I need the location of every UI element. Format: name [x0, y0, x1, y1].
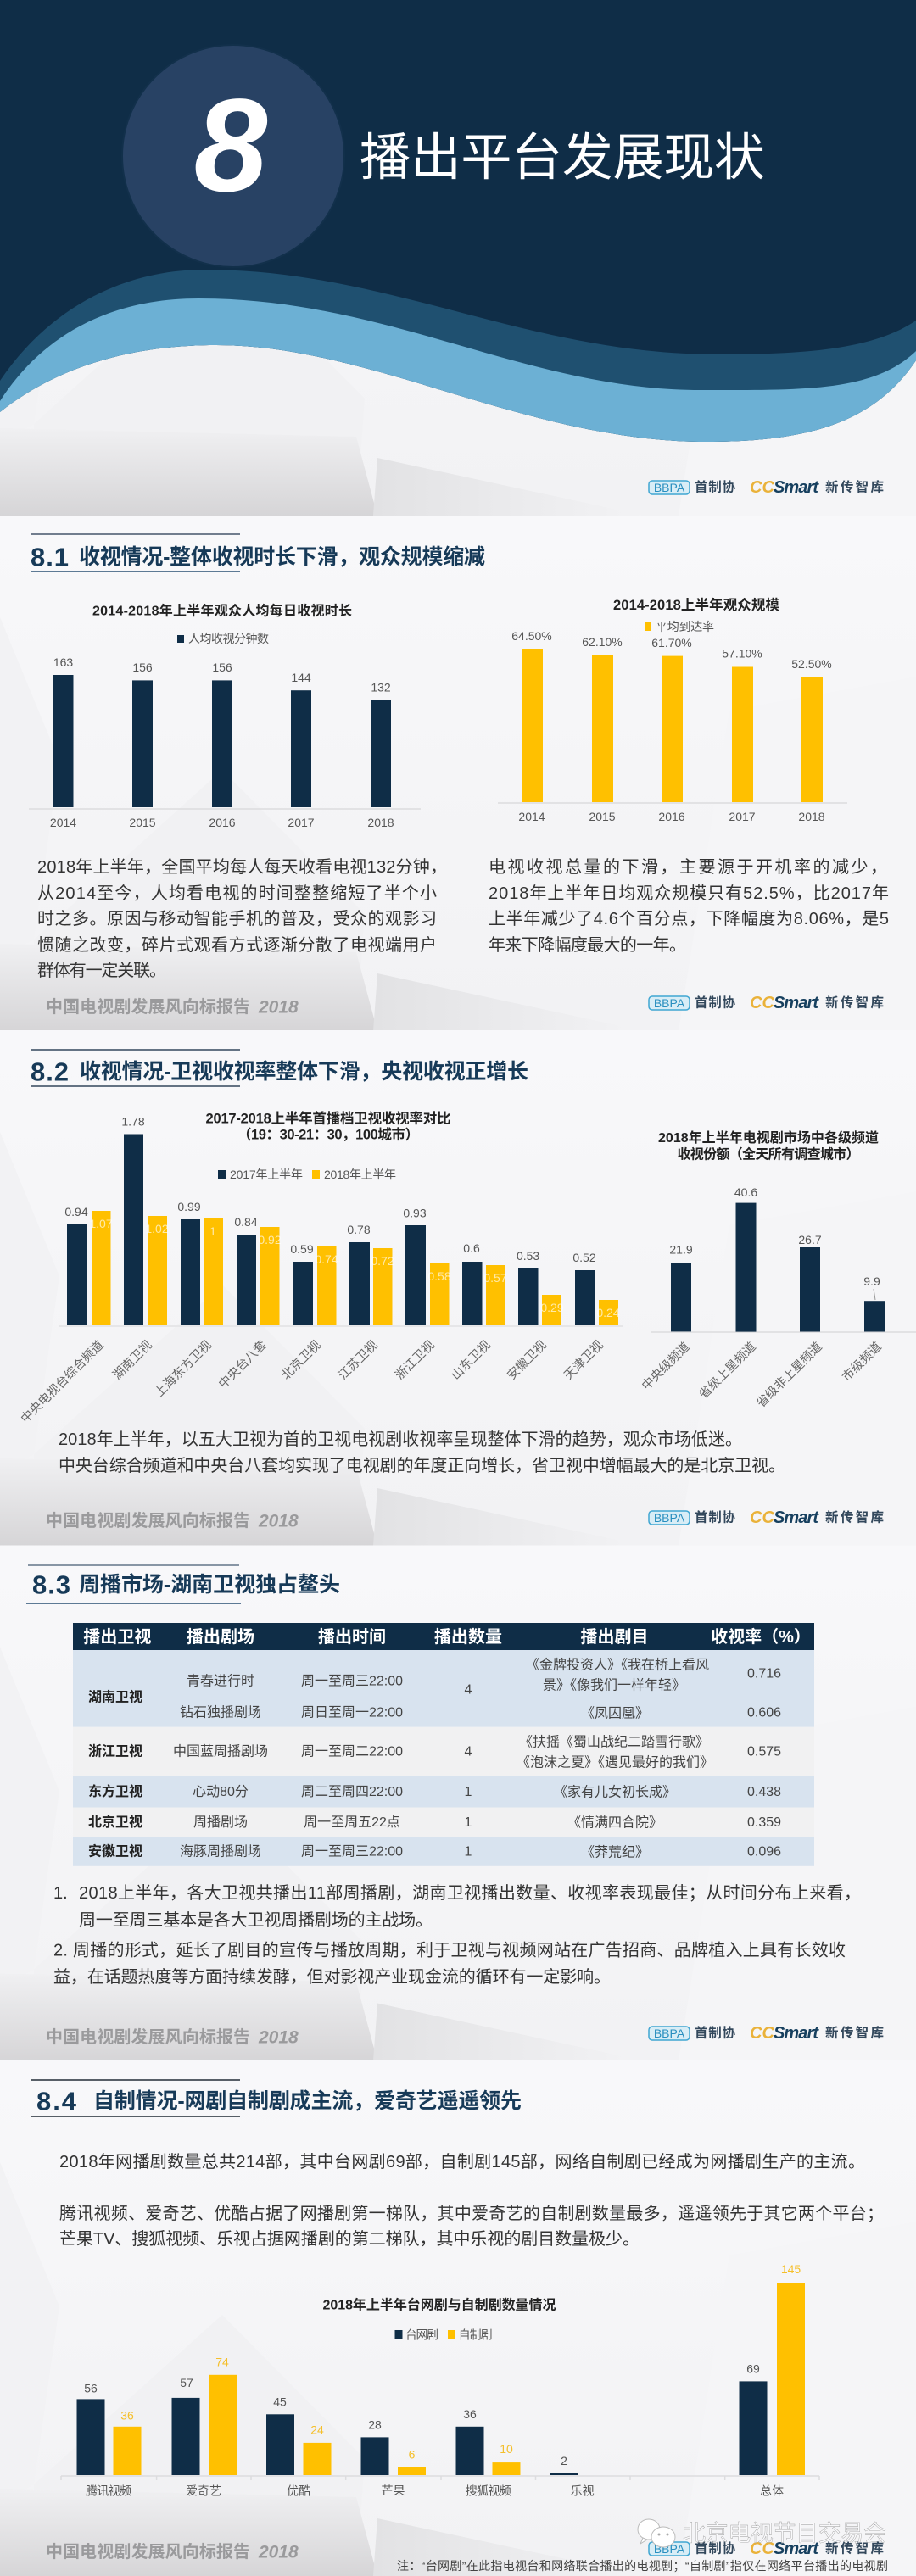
- footer 8.4: 新传智库: [825, 2540, 884, 2556]
- bar chart: satellite channel ratings: 浙江卫视: [393, 1338, 438, 1383]
- footer 8.2: CC: [750, 1508, 774, 1527]
- row: Dongfang: [73, 1776, 814, 1808]
- bar chart: daily viewing minutes: 144: [291, 671, 311, 684]
- wave: dark blue band: [0, 270, 916, 442]
- row: Anhui: 0.096: [747, 1845, 781, 1859]
- row: Zhejiang: 浙江卫视: [88, 1743, 142, 1759]
- bar chart: web drama counts: 爱奇艺: [186, 2484, 221, 2498]
- text block: right analysis: 上半年减少了4.6个百分点，下降幅度为8.06%，是5: [489, 909, 889, 928]
- bar chart: web drama counts: 10: [500, 2442, 513, 2456]
- bar chart: audience reach: 64.50%: [511, 629, 552, 643]
- text block: left analysis: 从2014至今，人均看电视的时间整整缩短了半个小: [37, 884, 437, 903]
- bar chart: web drama counts: 腾讯视频: [86, 2484, 131, 2498]
- row: Beijing: 0.359: [747, 1815, 781, 1830]
- bar chart: satellite channel ratings: 0.24: [596, 1306, 620, 1319]
- heading 8.2: [31, 1050, 528, 1087]
- heading 8.1: 8.1: [31, 543, 69, 572]
- bar chart: web drama counts: 74: [215, 2356, 229, 2369]
- footer 8.2: 首制协: [695, 1509, 735, 1525]
- bar chart: audience reach: [498, 596, 847, 823]
- bar chart: daily viewing minutes: 2017: [288, 816, 315, 829]
- logos: 首制协: [695, 478, 735, 495]
- bar chart: channel market share: 9.9: [863, 1274, 880, 1288]
- heading 8.2: 收视情况-卫视收视率整体下滑，央视收视正增长: [80, 1060, 528, 1084]
- bar chart: web drama counts: 搜狐视频: [466, 2484, 511, 2498]
- table header: 播出剧场: [187, 1627, 254, 1647]
- row: Dongfang: 《家有儿女初长成》: [554, 1784, 676, 1799]
- bar chart: channel market share: [639, 1129, 916, 1410]
- footnote: 注：“台网剧”在此指电视台和网络联合播出的电视剧；“自制剧”指仅在网络平台播出的电视剧: [397, 2559, 888, 2573]
- bar chart: satellite channel ratings: 中央电视台综合频道: [18, 1338, 107, 1426]
- footer 8.2: 新传智库: [825, 1509, 884, 1525]
- bar chart: satellite channel ratings: 0.92: [258, 1233, 282, 1246]
- bar chart: audience reach: 2015: [589, 810, 616, 823]
- row: Beijing: 周播剧场: [193, 1815, 248, 1830]
- bar chart: audience reach: 2016: [658, 810, 685, 823]
- panel: 8.4: [0, 2060, 916, 2576]
- bar chart: satellite channel ratings: 0.72: [371, 1254, 394, 1268]
- watermark text: 北京电视节目交易会: [683, 2521, 886, 2546]
- bar chart: web drama counts: 芒果: [382, 2484, 405, 2498]
- icon: wechat watermark: [638, 2519, 675, 2547]
- row: Dongfang: 1: [465, 1785, 472, 1799]
- bar chart: satellite channel ratings: 上海东方卫视: [152, 1338, 215, 1400]
- row: Anhui: 《莽荒纪》: [581, 1845, 649, 1860]
- bar chart: satellite channel ratings: 1: [209, 1224, 216, 1238]
- row: Hunan: 钻石独播剧场: [180, 1704, 261, 1720]
- footer 8.3: 首制协: [695, 2025, 735, 2040]
- bar chart: satellite channel ratings: 安徽卫视: [505, 1338, 550, 1383]
- text block: right analysis: [489, 857, 889, 955]
- footer 8.1: 新传智库: [825, 994, 884, 1011]
- footer 8.1: [46, 994, 884, 1018]
- bar chart: web drama counts: [61, 2262, 819, 2498]
- row: Hunan: 周日至周一22:00: [301, 1706, 403, 1720]
- bar chart: satellite channel ratings: 0.58: [427, 1269, 451, 1283]
- wave: light blue band: [0, 298, 916, 442]
- logos: CC: [750, 478, 774, 497]
- text block: left analysis: 时之多。原因与移动智能手机的普及，受众的观影习: [37, 909, 437, 928]
- text block: left analysis: [37, 857, 447, 980]
- bar chart: web drama counts: 36: [463, 2407, 477, 2421]
- bar chart: web drama counts: 6: [409, 2448, 416, 2462]
- bar chart: daily viewing minutes: 2014-2018年上半年观众人均每日收视时长: [92, 602, 352, 619]
- bar chart: channel market share: 40.6: [734, 1185, 757, 1199]
- bar chart: audience reach: 2017: [729, 810, 756, 823]
- footer 8.4: BBPA: [654, 2542, 685, 2556]
- header background navy: [0, 0, 916, 442]
- bar chart: satellite channel ratings: 江苏卫视: [336, 1338, 381, 1383]
- row: Hunan: 4: [465, 1682, 472, 1698]
- bar chart: satellite channel ratings: 湖南卫视: [110, 1338, 155, 1383]
- table header: 播出数量: [434, 1627, 502, 1647]
- row: Zhejiang: 周一至周二22:00: [301, 1745, 403, 1759]
- row: Hunan: 0.606: [747, 1706, 781, 1720]
- row: Beijing: 1: [465, 1815, 472, 1830]
- text block: left analysis: 惯随之改变，碎片式观看方式逐渐分散了电视端用户: [37, 935, 437, 955]
- bar chart: satellite channel ratings: [18, 1109, 623, 1426]
- logos: BBPA: [654, 481, 685, 494]
- row: Dongfang: 心动80分: [193, 1784, 249, 1799]
- text block: web drama analysis: 腾讯视频、爱奇艺、优酷占据了网播剧第一梯队，其中爱奇艺的自制剧数量最多，遥遥领先于其它两个平台；: [59, 2204, 884, 2223]
- bar chart: web drama counts: 57: [180, 2376, 193, 2389]
- row: Hunan: [73, 1650, 814, 1727]
- footer 8.1: CC: [750, 994, 774, 1012]
- logos: 新传智库: [825, 478, 884, 495]
- text block: satellite analysis: 2018年上半年，以五大卫视为首的卫视电视剧收视率呈现整体下滑的趋势，观众市场低迷。: [59, 1430, 742, 1449]
- bar chart: web drama counts: 69: [746, 2362, 760, 2376]
- bar chart: satellite channel ratings: 0.84: [234, 1215, 258, 1229]
- table header: 播出卫视: [83, 1627, 151, 1647]
- bar chart: daily viewing minutes: 156: [132, 661, 153, 674]
- footer 8.3: CC: [750, 2024, 774, 2043]
- footer 8.3: BBPA: [654, 2027, 685, 2040]
- footer 8.4: 中国电视剧发展风向标报告: [46, 2542, 250, 2562]
- footer 8.3: 中国电视剧发展风向标报告: [46, 2027, 250, 2047]
- bar chart: satellite channel ratings: 1.78: [121, 1115, 145, 1129]
- row: Anhui: 海豚周播剧场: [180, 1843, 261, 1859]
- bar chart: daily viewing minutes: 2018: [367, 816, 394, 829]
- bar chart: satellite channel ratings: 0.94: [64, 1205, 88, 1218]
- bar chart: channel market share: 收视份额（全天所有调查城市）: [677, 1146, 860, 1162]
- bar chart: web drama counts: 145: [781, 2262, 801, 2276]
- bar chart: satellite channel ratings: 0.74: [315, 1252, 338, 1266]
- bar chart: web drama counts: 优酷: [287, 2484, 310, 2498]
- bar chart: audience reach: 52.50%: [791, 657, 832, 671]
- bar chart: audience reach: 62.10%: [582, 635, 623, 649]
- text block: weekly notes: 1.: [53, 1884, 68, 1903]
- row: Dongfang: 0.438: [747, 1785, 781, 1799]
- row: Beijing: 北京卫视: [88, 1814, 142, 1830]
- bar chart: audience reach: 2014: [518, 810, 545, 823]
- footer 8.1: 2018: [258, 997, 299, 1018]
- row: Zhejiang: 《泡沫之夏》《遇见最好的我们》: [517, 1755, 713, 1770]
- text block: web drama analysis: 芒果TV、搜狐视频、乐视占据网播剧的第二梯队，其中乐视的剧目数量极少。: [59, 2229, 640, 2249]
- table header: [73, 1623, 814, 1650]
- heading 8.2: 8.2: [31, 1057, 69, 1087]
- row: Zhejiang: 《扶摇《蜀山战纪二踏雪行歌》: [519, 1735, 709, 1750]
- text block: satellite analysis: 中央台综合频道和中央台八套均实现了电视剧的年度正向增长，省卫视中增幅最大的是北京卫视。: [59, 1456, 785, 1475]
- row: Zhejiang: 4: [465, 1745, 472, 1759]
- bar chart: daily viewing minutes: 156: [212, 661, 232, 674]
- text block: web drama analysis: [59, 2152, 884, 2249]
- bar chart: audience reach: 2018: [798, 810, 825, 823]
- row: Hunan: 《凤囚凰》: [581, 1706, 649, 1721]
- text block: right analysis: 2018年上半年日均观众规模只有52.5%，比2017年: [489, 884, 889, 903]
- bar chart: web drama counts: 56: [84, 2381, 98, 2395]
- bar chart: audience reach: 61.70%: [651, 636, 692, 650]
- text block: weekly notes: 2018上半年，各大卫视共播出11部周播剧，湖南卫视播出数量、收视率表现最佳；从时间分布上来看，: [79, 1883, 861, 1903]
- text block: right analysis: 年来下降幅度最大的一年。: [489, 935, 686, 955]
- footer 8.3: 2018: [258, 2028, 299, 2047]
- bar chart: daily viewing minutes: 132: [371, 680, 391, 694]
- footer 8.3: [46, 2024, 884, 2047]
- bar chart: web drama counts: 2: [561, 2454, 567, 2467]
- panel: 8.1: [0, 516, 916, 1031]
- heading 8.3: 周播市场-湖南卫视独占鳌头: [79, 1573, 340, 1597]
- row: Beijing: 周一至周五22点: [304, 1815, 400, 1830]
- panel: 8.2: [0, 1030, 916, 1546]
- bar chart: web drama counts: 36: [120, 2408, 134, 2422]
- footer 8.4: [46, 2540, 884, 2562]
- bar chart: web drama counts: 总体: [760, 2484, 784, 2498]
- bar chart: channel market share: 中央级频道: [639, 1340, 693, 1393]
- row: Dongfang: 东方卫视: [88, 1783, 142, 1799]
- text block: satellite analysis: [59, 1430, 785, 1475]
- heading 8.4: 自制情况-网剧自制剧成主流，爱奇艺遥遥领先: [93, 2089, 522, 2113]
- bar chart: channel market share: 市级频道: [840, 1340, 885, 1385]
- bar chart: satellite channel ratings: （19：30-21：30，100城市）: [237, 1126, 419, 1143]
- bar chart: daily viewing minutes: 2015: [129, 816, 156, 829]
- row: Anhui: 1: [465, 1845, 472, 1859]
- text block: web drama analysis: 2018年网播剧数量总共214部，其中台网剧69部，自制剧145部，网络自制剧已经成为网播剧生产的主流。: [59, 2152, 865, 2172]
- bar chart: web drama counts: 2018年上半年台网剧与自制剧数量情况: [322, 2296, 556, 2313]
- panel: header: [0, 0, 916, 516]
- bar chart: channel market share: 26.7: [798, 1233, 822, 1246]
- row: Anhui: 安徽卫视: [88, 1843, 142, 1859]
- row: Zhejiang: 0.575: [747, 1745, 781, 1759]
- footer 8.3: 新传智库: [825, 2025, 884, 2040]
- bar chart: satellite channel ratings: 0.29: [540, 1301, 564, 1314]
- text block: left analysis: 2018年上半年，全国平均每人每天收看电视132分钟，: [37, 857, 447, 877]
- footer 8.4: 2018: [258, 2542, 299, 2562]
- text block: right analysis: 电视收视总量的下滑，主要源于开机率的减少，: [489, 857, 887, 877]
- bar chart: satellite channel ratings: 2017年上半年: [230, 1168, 303, 1181]
- heading 8.1: [31, 534, 485, 572]
- bar chart: web drama counts: 台网剧: [405, 2328, 438, 2342]
- bar chart: channel market share: 2018年上半年电视剧市场中各级频道: [658, 1129, 879, 1146]
- footer 8.1: 首制协: [695, 994, 735, 1011]
- bar chart: daily viewing minutes: 2014: [50, 816, 76, 829]
- row: Dongfang: 周二至周四22:00: [301, 1785, 403, 1799]
- heading 8.3: [26, 1565, 340, 1603]
- bar chart: audience reach: 57.10%: [722, 647, 762, 661]
- text block: weekly notes: 益，在话题热度等方面持续发酵，但对影视产业现金流的循环有一定影响。: [53, 1967, 611, 1987]
- bar chart: daily viewing minutes: 2016: [209, 816, 236, 829]
- bar chart: channel market share: 省级上星频道: [696, 1340, 759, 1402]
- bar chart: audience reach: 2014-2018上半年观众规模: [613, 596, 780, 613]
- bar chart: web drama counts: 28: [368, 2418, 382, 2432]
- table header: 收视率（%）: [711, 1627, 811, 1647]
- footer 8.2: BBPA: [654, 1511, 685, 1525]
- footer 8.2: 中国电视剧发展风向标报告: [46, 1511, 250, 1531]
- bar chart: web drama counts: 自制剧: [459, 2328, 493, 2342]
- section number: 8: [194, 72, 268, 220]
- bar chart: satellite channel ratings: 0.57: [483, 1271, 507, 1285]
- footer 8.2: [46, 1508, 884, 1531]
- heading 8.4: [31, 2080, 522, 2116]
- row: Anhui: 周一至周三22:00: [301, 1845, 403, 1859]
- row: Hunan: 青春进行时: [187, 1674, 254, 1689]
- row: Hunan: 湖南卫视: [88, 1689, 142, 1704]
- text block: weekly notes: 2. 周播的形式，延长了剧目的宣传与播放周期，利于卫视与视频网站在广告招商、品牌植入上具有长效收: [53, 1940, 846, 1960]
- bar chart: satellite channel ratings: 0.53: [517, 1249, 539, 1263]
- row: Hunan: 《金牌投资人》《我在桥上看风: [526, 1657, 709, 1672]
- heading 8.1: 收视情况-整体收视时长下滑，观众规模缩减: [79, 545, 485, 569]
- footer 8.1: 中国电视剧发展风向标报告: [46, 997, 250, 1017]
- bar chart: satellite channel ratings: 0.6: [463, 1241, 480, 1255]
- bar chart: satellite channel ratings: 0.93: [403, 1206, 427, 1219]
- heading 8.3: 8.3: [32, 1570, 70, 1599]
- footer 8.1: Smart: [774, 994, 819, 1012]
- row: Beijing: 《情满四合院》: [567, 1815, 662, 1830]
- text block: weekly notes: 周一至周三基本是各大卫视周播剧场的主战场。: [79, 1910, 433, 1930]
- footer 8.2: 2018: [258, 1511, 299, 1531]
- bar chart: satellite channel ratings: 山东卫视: [449, 1338, 494, 1383]
- bar chart: daily viewing minutes: 163: [53, 655, 73, 669]
- footer 8.1: BBPA: [654, 996, 685, 1010]
- bar chart: satellite channel ratings: 1.02: [145, 1222, 169, 1235]
- bar chart: satellite channel ratings: 0.99: [177, 1200, 201, 1213]
- panel: 8.3: [0, 1545, 916, 2060]
- bar chart: audience reach: 平均到达率: [656, 620, 714, 633]
- heading 8.4: 8.4: [36, 2086, 77, 2116]
- bar chart: daily viewing minutes: [29, 602, 421, 829]
- row: Hunan: 0.716: [747, 1667, 781, 1681]
- number circle: [122, 45, 344, 267]
- footer 8.4: CC: [750, 2540, 774, 2558]
- row: Hunan: 周一至周三22:00: [301, 1674, 403, 1689]
- table: weekly broadcast: [73, 1623, 814, 1866]
- bar chart: satellite channel ratings: 0.59: [290, 1242, 314, 1256]
- bar chart: satellite channel ratings: 0.52: [572, 1251, 596, 1264]
- row: Beijing: [73, 1808, 814, 1837]
- footer 8.4: Smart: [774, 2540, 819, 2558]
- bar chart: satellite channel ratings: 北京卫视: [279, 1338, 324, 1383]
- row: Zhejiang: [73, 1727, 814, 1776]
- bar chart: web drama counts: 24: [310, 2423, 324, 2437]
- bar chart: satellite channel ratings: 天津卫视: [561, 1338, 606, 1383]
- footer 8.2: Smart: [774, 1508, 819, 1527]
- logos: Smart: [774, 478, 819, 497]
- bar chart: satellite channel ratings: 0.78: [347, 1223, 371, 1236]
- title: 播出平台发展现状: [360, 129, 765, 187]
- row: Anhui: [73, 1837, 814, 1866]
- footer 8.3: Smart: [774, 2024, 819, 2043]
- bar chart: satellite channel ratings: 1.07: [89, 1217, 113, 1230]
- bar chart: satellite channel ratings: 2018年上半年: [324, 1168, 396, 1181]
- bar chart: satellite channel ratings: 中央台八套: [215, 1337, 270, 1391]
- bar chart: daily viewing minutes: 人均收视分钟数: [188, 632, 269, 645]
- bar chart: channel market share: 省级非上星频道: [754, 1340, 825, 1410]
- text block: left analysis: 群体有一定关联。: [37, 961, 166, 980]
- bar chart: channel market share: 21.9: [669, 1243, 693, 1257]
- text block: weekly notes: [53, 1883, 861, 1987]
- row: Hunan: 景》《像我们一样年轻》: [543, 1677, 685, 1692]
- footer 8.4: 首制协: [695, 2540, 735, 2556]
- logos: [649, 478, 884, 497]
- table header: 播出剧目: [580, 1627, 648, 1647]
- bar chart: satellite channel ratings: 2017-2018上半年首播档卫视收视率对比: [205, 1109, 451, 1126]
- bar chart: web drama counts: 乐视: [571, 2484, 595, 2498]
- table header: 播出时间: [318, 1627, 386, 1647]
- row: Zhejiang: 中国蓝周播剧场: [173, 1743, 268, 1759]
- bar chart: web drama counts: 45: [273, 2395, 287, 2408]
